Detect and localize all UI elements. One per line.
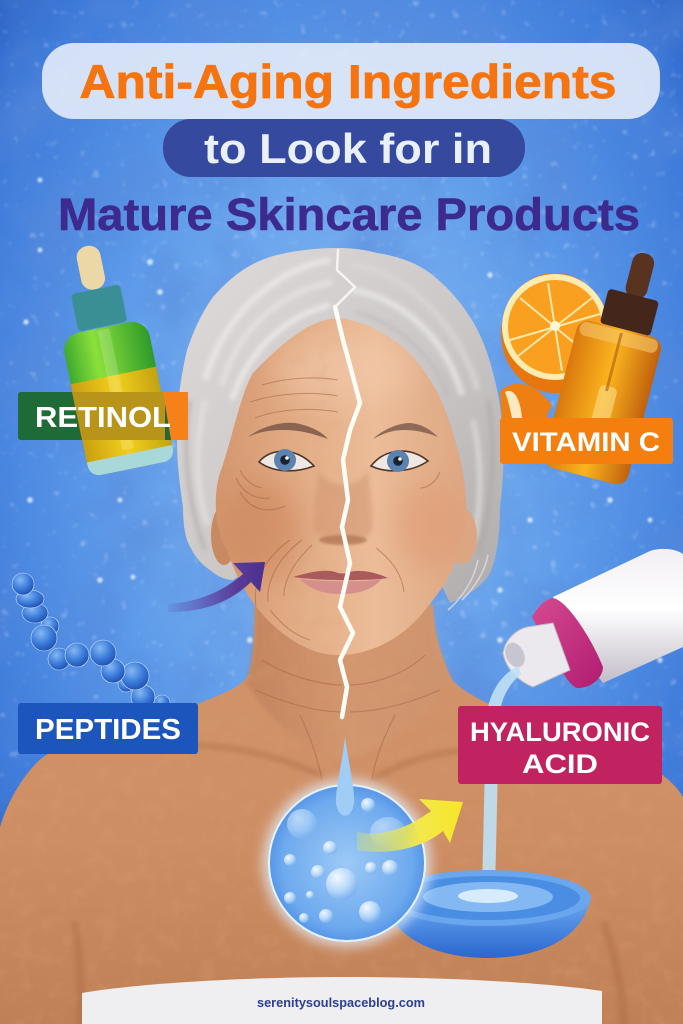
shoulders, chest and neck — [0, 605, 683, 1024]
water stream — [482, 666, 521, 892]
retinol bottle icon — [44, 237, 175, 477]
nose shading — [314, 474, 373, 538]
hair back — [177, 248, 503, 603]
peptides label: PEPTIDES — [35, 714, 181, 746]
left eye — [259, 449, 314, 471]
yellow arrow — [357, 799, 463, 852]
title line two: to Look for in — [204, 125, 492, 172]
vitamin c label — [500, 418, 673, 464]
dropper collar — [71, 284, 127, 332]
title — [42, 43, 660, 240]
hyaluronic acid label — [458, 706, 662, 784]
nozzle opening — [501, 639, 529, 671]
tube icon — [501, 549, 683, 688]
water drop — [336, 737, 354, 816]
right eye — [371, 450, 428, 472]
skin grain — [205, 310, 342, 660]
bottle body — [61, 319, 175, 477]
shoulder glow — [578, 321, 659, 354]
towel — [82, 977, 602, 1024]
left eyebrow — [248, 423, 328, 439]
under-nose shadow — [319, 535, 367, 545]
bottle body — [541, 318, 664, 487]
neck tone — [246, 605, 452, 760]
tube nozzle — [503, 623, 570, 687]
dropper bulb — [75, 244, 107, 292]
lips — [293, 571, 388, 594]
vitamin c bottle icon — [541, 241, 683, 487]
skin texture — [0, 605, 683, 1024]
title line three: Mature Skincare Products — [58, 189, 640, 240]
retinol label: RETINOL — [35, 402, 171, 434]
wisps of hair — [448, 555, 488, 610]
right ear — [447, 508, 477, 564]
website url: serenitysoulspaceblog.com — [257, 995, 425, 1010]
dropper collar — [600, 288, 659, 336]
hyaluronic acid label: HYALURONIC — [470, 717, 650, 747]
tube body — [553, 549, 683, 683]
title pill: line two — [163, 119, 525, 177]
hair strands — [186, 260, 493, 555]
hyaluronic acid label: ACID — [522, 749, 598, 779]
hydration sphere icon — [263, 737, 431, 947]
dropper bulb — [623, 251, 656, 301]
title pill: line one — [42, 43, 660, 119]
collarbones and chest shading — [75, 745, 624, 1024]
retinol label — [18, 392, 188, 440]
cheek colour — [222, 480, 302, 580]
woman portrait — [0, 248, 683, 1024]
crack divider — [335, 250, 360, 717]
vitamin c label: VITAMIN C — [512, 427, 660, 457]
wrinkles — [236, 378, 440, 640]
bottle base — [87, 445, 175, 477]
purple arrow — [168, 562, 265, 612]
neck lines — [255, 655, 440, 780]
orange slice icon — [500, 273, 609, 420]
face — [216, 318, 466, 655]
tube collar — [532, 598, 603, 688]
inner ampoule — [585, 384, 618, 447]
forehead highlight — [275, 336, 415, 404]
peptides label — [18, 703, 198, 754]
right eyebrow — [373, 423, 438, 439]
yellow liquid — [71, 367, 173, 464]
orange wedge — [500, 384, 552, 420]
title line one: Anti-Aging Ingredients — [80, 55, 616, 108]
peptide chain icon — [12, 573, 170, 711]
left ear — [211, 505, 237, 565]
bowl icon — [385, 870, 591, 958]
inner pipette — [98, 328, 134, 450]
